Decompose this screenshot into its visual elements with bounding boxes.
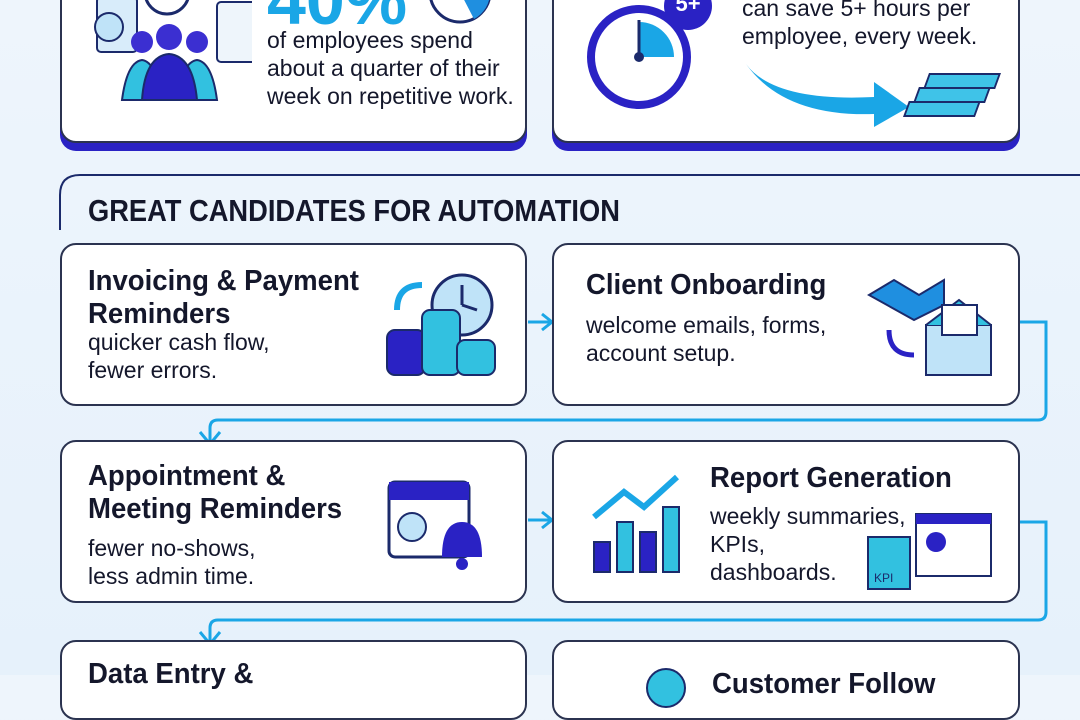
card: client onboarding: welcome emails, forms,: [586, 312, 826, 338]
card: invoicing: [60, 243, 527, 406]
card: client onboarding: account setup.: [586, 340, 736, 366]
description: of employees spend: [267, 27, 473, 53]
card: invoicing: Reminders: [88, 298, 230, 330]
card: appointments: less admin time.: [88, 563, 254, 589]
card: invoicing: fewer errors.: [88, 357, 217, 383]
card: invoicing: quicker cash flow,: [88, 329, 270, 355]
stat card: 5+ hours: [552, 0, 1020, 143]
card: report generation: [552, 440, 1020, 603]
card: appointments: fewer no-shows,: [88, 535, 255, 561]
card: report generation: weekly summaries,: [710, 503, 906, 529]
description: [267, 27, 514, 109]
arrow to money: [746, 64, 1001, 127]
icon circle: [646, 668, 686, 708]
icon: stopwatch small: [430, 0, 490, 24]
icon: coins and clock: [386, 274, 496, 376]
card: report generation: dashboards.: [710, 559, 837, 585]
icon: bar chart: [592, 474, 680, 573]
icon: KPI dashboard: [867, 513, 992, 590]
icon: team with documents: [94, 0, 252, 101]
section heading: GREAT CANDIDATES FOR AUTOMATION: [88, 193, 620, 228]
icon: stopwatch: [587, 5, 691, 109]
card: customer follow-up: Customer Follow: [712, 668, 935, 700]
description: employee, every week.: [742, 23, 977, 49]
card: invoicing: Invoicing & Payment: [88, 265, 359, 297]
card: appointments: Appointment &: [88, 460, 285, 492]
icon: handshake envelope: [867, 278, 992, 376]
description: [742, 0, 977, 49]
card: appointments: [60, 440, 527, 603]
card: client onboarding: Client Onboarding: [586, 269, 826, 301]
card: report generation: Report Generation: [710, 462, 952, 494]
card: client onboarding: [552, 243, 1020, 406]
card: report generation: KPIs,: [710, 531, 765, 557]
icon: KPI dashboard: KPI: [874, 571, 893, 585]
badge 5+: [664, 0, 712, 30]
stat card: 40%: [60, 0, 527, 143]
description: about a quarter of their: [267, 55, 500, 81]
card: data entry: Data Entry &: [88, 658, 253, 690]
card: appointments: Meeting Reminders: [88, 493, 342, 525]
card: customer follow-up: [552, 640, 1020, 720]
card: data entry: [60, 640, 527, 720]
icon: calendar bell: [388, 480, 482, 570]
description: week on repetitive work.: [267, 83, 514, 109]
